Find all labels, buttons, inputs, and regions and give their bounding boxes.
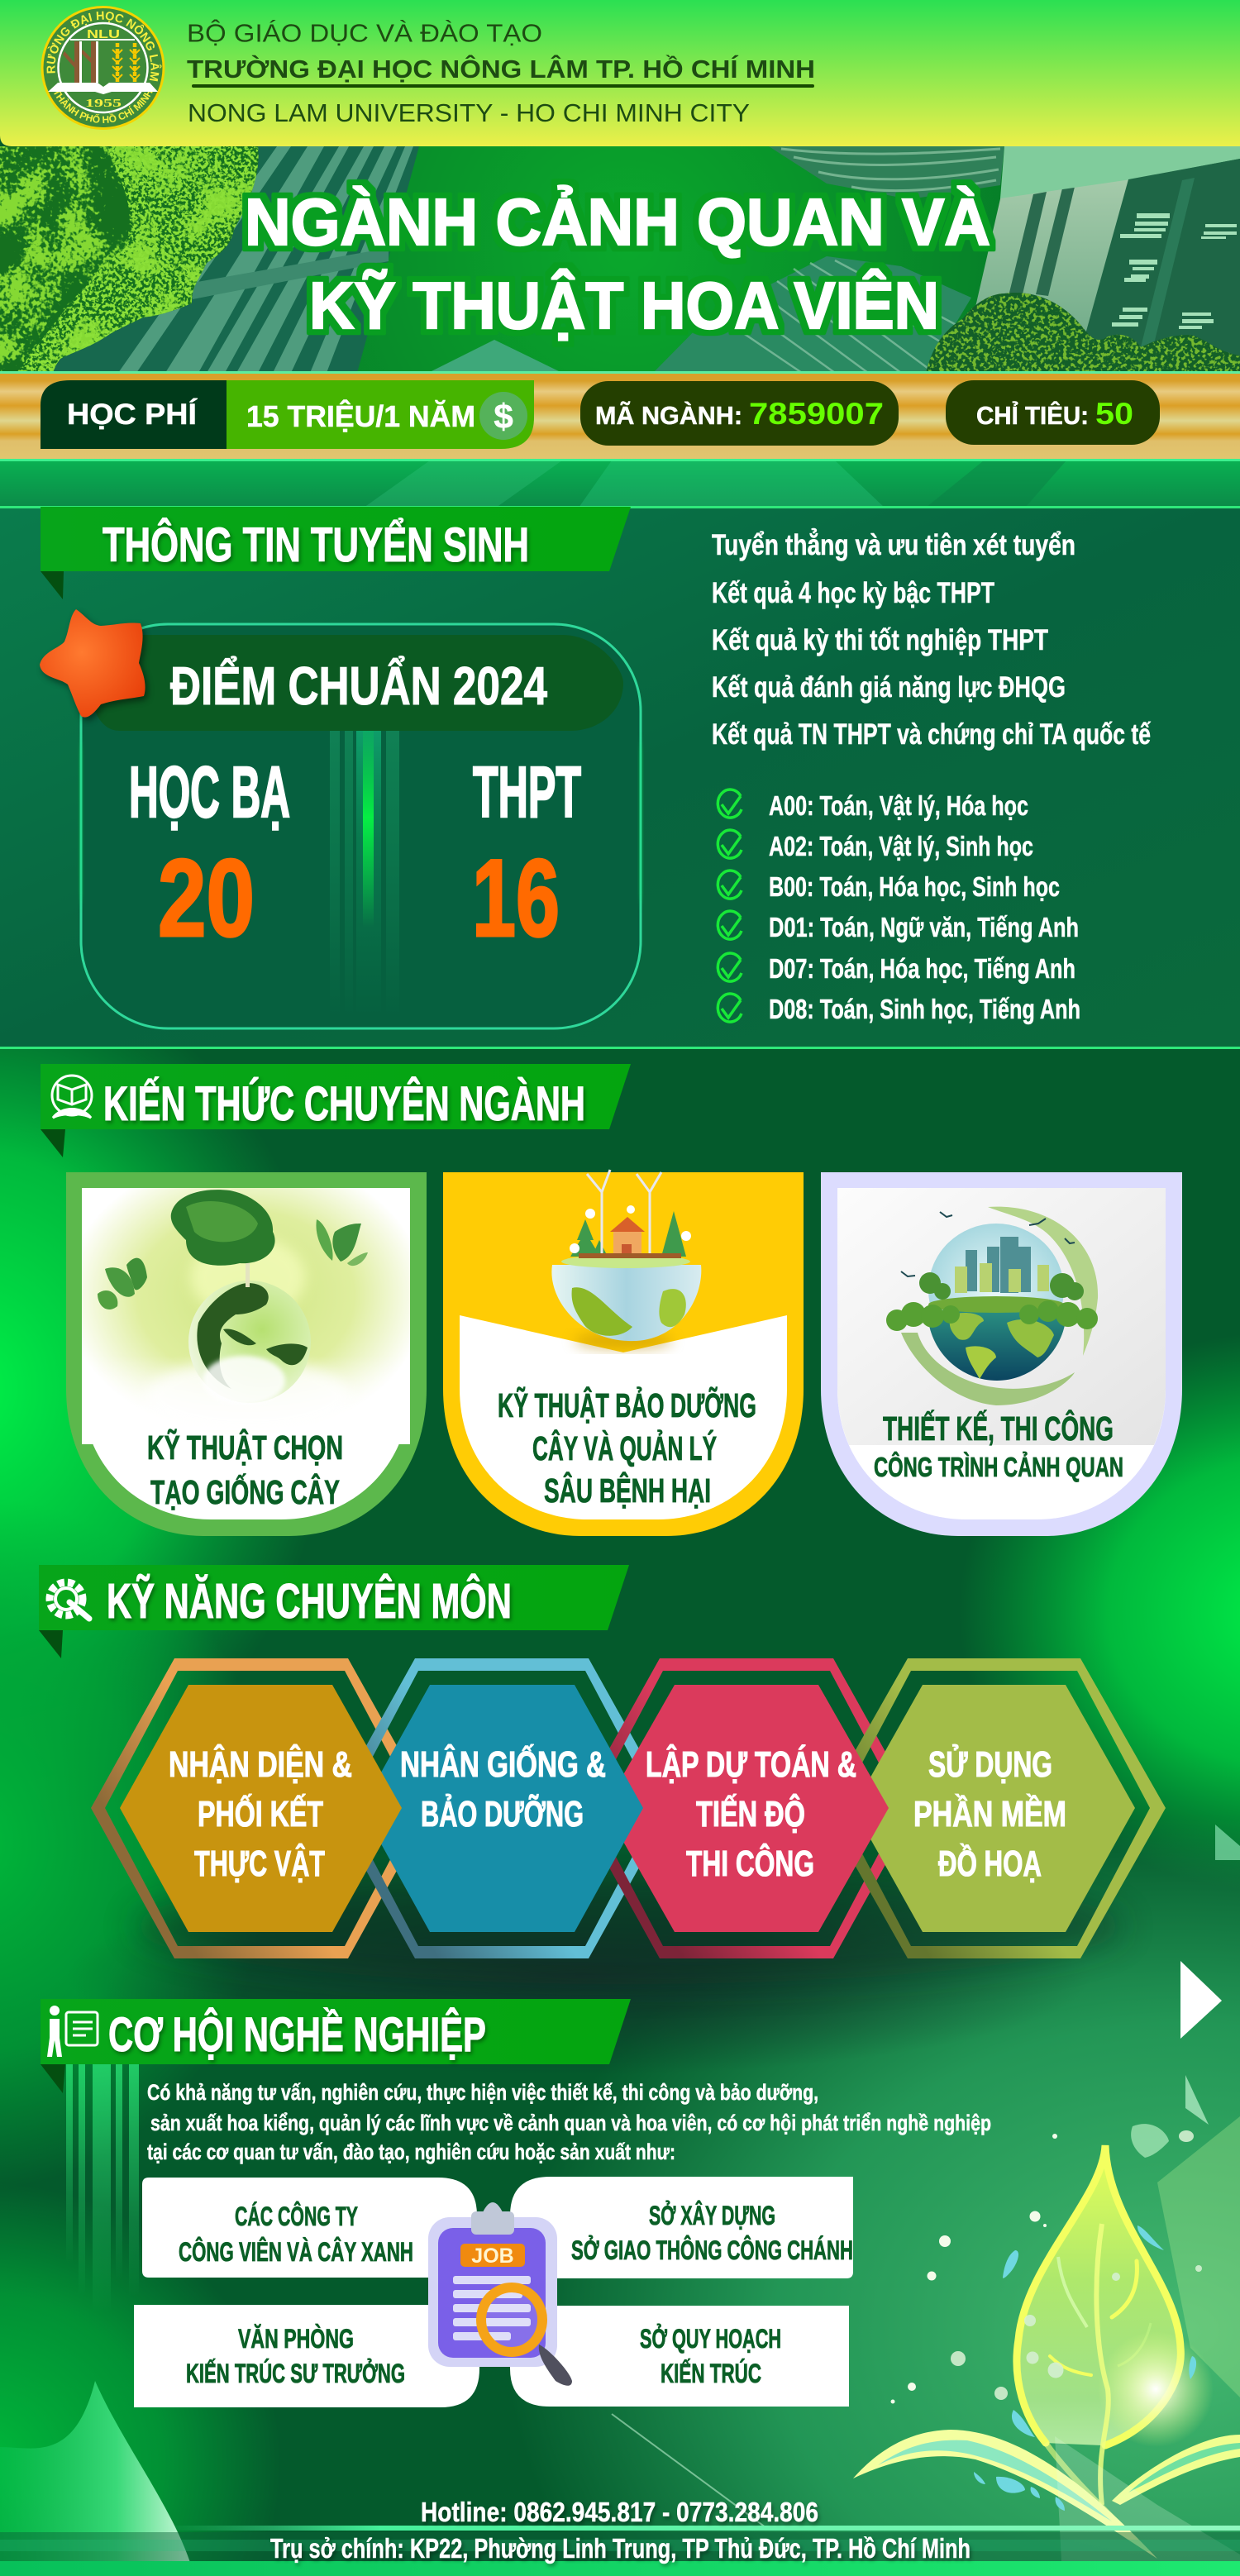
icon: job clipboard [428,2202,572,2386]
list: subject combinations: A02: Toán, Vật lý, Sinh học [769,831,1033,861]
hexagon: cost estimating [604,1685,889,1932]
card: chief architect office: KIẾN TRÚC SƯ TRƯỞNG [186,2359,405,2388]
panel: benchmark scores: 16 [472,837,560,960]
icon: glowing leaf [853,2145,1240,2576]
hexagon: plant identification: PHỐI KẾT [198,1792,323,1834]
card: construction department: SỞ XÂY DỰNG [649,2201,775,2230]
decoration: triangles, leaf and water drops [0,1825,1240,2576]
text block: career description: Có khả năng tư vấn, nghiên cứu, thực hiện việc thiết kế, thi công và bảo dưỡng, [147,2080,818,2105]
footer contact: Trụ sở chính: KP22, Phường Linh Trung, TP Thủ Đức, TP. Hồ Chí Minh [270,2533,971,2564]
hexagon: propagation [361,1685,643,1932]
hexagon: plant identification: NHẬN DIỆN & [169,1744,352,1785]
list: subject combinations [718,789,1080,1024]
text block: career description: sản xuất hoa kiểng, quản lý các lĩnh vực về cảnh quan và hoa viên, có cơ hội phát triển nghề nghiệp [150,2111,991,2135]
quota pill: CHỈ TIÊU: [976,400,1089,430]
info band [0,371,1240,461]
major code pill [580,381,899,446]
card: plant care: SÂU BỆNH HẠI [544,1472,711,1510]
shadow under hexagons [132,1868,1124,1984]
heading: Thông tin tuyển sinh [41,507,631,599]
icon: orange star [40,609,145,718]
heading: Cơ hội nghề nghiệp [41,1999,631,2312]
card: chief architect office: VĂN PHÒNG [238,2324,354,2354]
major code pill: MÃ NGÀNH: [595,401,742,430]
panel: benchmark scores: HỌC BẠ [129,752,290,832]
card: construction department: SỞ GIAO THÔNG CÔNG CHÁNH [571,2235,853,2265]
illustration: globe and tree [98,1190,368,1434]
heading: Cơ hội nghề nghiệp: CƠ HỘI NGHỀ NGHIỆP [108,2008,486,2062]
header text: NONG LAM UNIVERSITY - HO CHI MINH CITY [188,98,750,127]
card: planning department: KIẾN TRÚC [661,2359,761,2388]
tuition pill: 15 TRIỆU/1 NĂM [246,398,475,433]
hero background: city and trees [0,146,1240,373]
card: parks companies: CÔNG VIÊN VÀ CÂY XANH [179,2237,413,2267]
center stripes [330,719,399,1017]
tuition pill [41,380,534,449]
card: plant breeding [66,1172,427,1536]
header text: BỘ GIÁO DỤC VÀ ĐÀO TẠO [187,18,542,48]
quota pill [946,380,1160,445]
logo: Nong Lam University [41,6,165,130]
card: planning department [510,2306,849,2407]
illustration: earth and city [886,1207,1098,1405]
hexagon outlines [91,1658,1166,1958]
heading: Kỹ năng chuyên môn: KỸ NĂNG CHUYÊN MÔN [107,1573,512,1629]
icon: dollar: $ [494,397,513,436]
panel: admissions [0,506,1240,1049]
title: NGÀNH CẢNH QUAN VÀ [245,185,990,259]
list: subject combinations: D08: Toán, Sinh học, Tiếng Anh [769,994,1080,1024]
icon: book emblem [52,1076,92,1118]
header band [0,0,1240,146]
list: subject combinations: B00: Toán, Hóa học, Sinh học [769,871,1060,902]
card: plant care [443,1170,804,1536]
card: landscape design: THIẾT KẾ, THI CÔNG [883,1410,1114,1448]
logo: Nong Lam University: THÀNH PHỐ HỒ CHÍ MINH [54,92,153,123]
list: admission methods [712,528,1151,751]
list: admission methods: Kết quả đánh giá năng lực ĐHQG [712,671,1066,704]
card: landscape design [821,1172,1182,1536]
panel: benchmark scores: THPT [473,752,581,832]
major code pill: 7859007 [749,397,884,431]
card: landscape design: CÔNG TRÌNH CẢNH QUAN [874,1451,1123,1482]
hexagon: propagation: BẢO DƯỠNG [421,1793,584,1834]
hexagon: graphics software [853,1685,1135,1932]
below-band strip [0,460,1240,508]
hexagon: propagation: NHÂN GIỐNG & [400,1743,606,1785]
list: admission methods: Kết quả kỳ thi tốt nghiệp THPT [712,624,1048,656]
hexagon: graphics software: PHẦN MỀM [913,1793,1066,1834]
heading: Kiến thức chuyên ngành [41,1064,631,1157]
title: KỸ THUẬT HOA VIÊN [309,269,939,342]
panel: benchmark scores: ĐIỂM CHUẨN 2024 [170,656,547,716]
list: subject combinations: D01: Toán, Ngữ văn, Tiếng Anh [769,912,1079,942]
panel: benchmark scores [40,609,642,1028]
footer stripes [0,2526,1240,2576]
card: chief architect office [134,2305,479,2407]
icon: presenter [47,2006,98,2057]
card: plant breeding: TẠO GIỐNG CÂY [150,1473,340,1511]
card: parks companies: CÁC CÔNG TY [235,2202,358,2231]
panel: benchmark scores: 20 [158,837,255,960]
card: plant breeding: KỸ THUẬT CHỌN [147,1429,343,1467]
hexagon: plant identification: THỰC VẬT [194,1843,325,1884]
chart: skill hexagons [91,1658,1166,1958]
card: planning department: SỞ QUY HOẠCH [640,2324,781,2354]
heading: Kỹ năng chuyên môn [39,1565,629,1658]
list: admission methods: Tuyển thẳng và ưu tiên xét tuyển [712,528,1075,561]
hexagon: cost estimating: LẬP DỰ TOÁN & [646,1744,856,1785]
icon: job clipboard: JOB [471,2244,514,2268]
logo: Nong Lam University: NLU [87,27,120,41]
list: subject combinations: A00: Toán, Vật lý, Hóa học [769,790,1028,821]
header text [187,18,815,127]
text block: career description: tại các cơ quan tư vấn, đào tạo, nghiên cứu hoặc sản xuất như: [147,2140,675,2164]
footer contact [270,2497,971,2564]
list: subject combinations: D07: Toán, Hóa học, Tiếng Anh [769,953,1075,984]
hexagon: graphics software: SỬ DỤNG [928,1743,1052,1785]
card: plant care: KỸ THUẬT BẢO DƯỠNG [498,1386,756,1424]
footer contact: Hotline: 0862.945.817 - 0773.284.806 [421,2497,818,2527]
card: construction department [510,2177,853,2278]
hexagon: cost estimating: THI CÔNG [686,1842,814,1884]
tuition pill: HỌC PHÍ [67,398,198,431]
illustration: floating island [551,1170,701,1349]
hexagon: plant identification [120,1685,402,1932]
hexagon: cost estimating: TIẾN ĐỘ [696,1792,805,1834]
card: plant care: CÂY VÀ QUẢN LÝ [532,1429,717,1467]
heading: Kiến thức chuyên ngành: KIẾN THỨC CHUYÊN NGÀNH [103,1077,585,1131]
quota pill: 50 [1095,397,1133,431]
card: parks companies [142,2178,477,2278]
icon: gear and wrench [50,1582,89,1619]
header text: TRƯỜNG ĐẠI HỌC NÔNG LÂM TP. HỒ CHÍ MINH [187,54,815,83]
list: admission methods: Kết quả 4 học kỳ bậc THPT [712,577,994,609]
title [245,185,990,342]
hexagon: graphics software: ĐỒ HOẠ [938,1843,1042,1884]
heading: Thông tin tuyển sinh: THÔNG TIN TUYỂN SINH [103,518,529,572]
text block: career description [147,2080,991,2164]
icon: dollar [479,392,527,440]
background: lower page gradient [0,1047,1240,2576]
logo: Nong Lam University: 1955 [85,98,122,110]
